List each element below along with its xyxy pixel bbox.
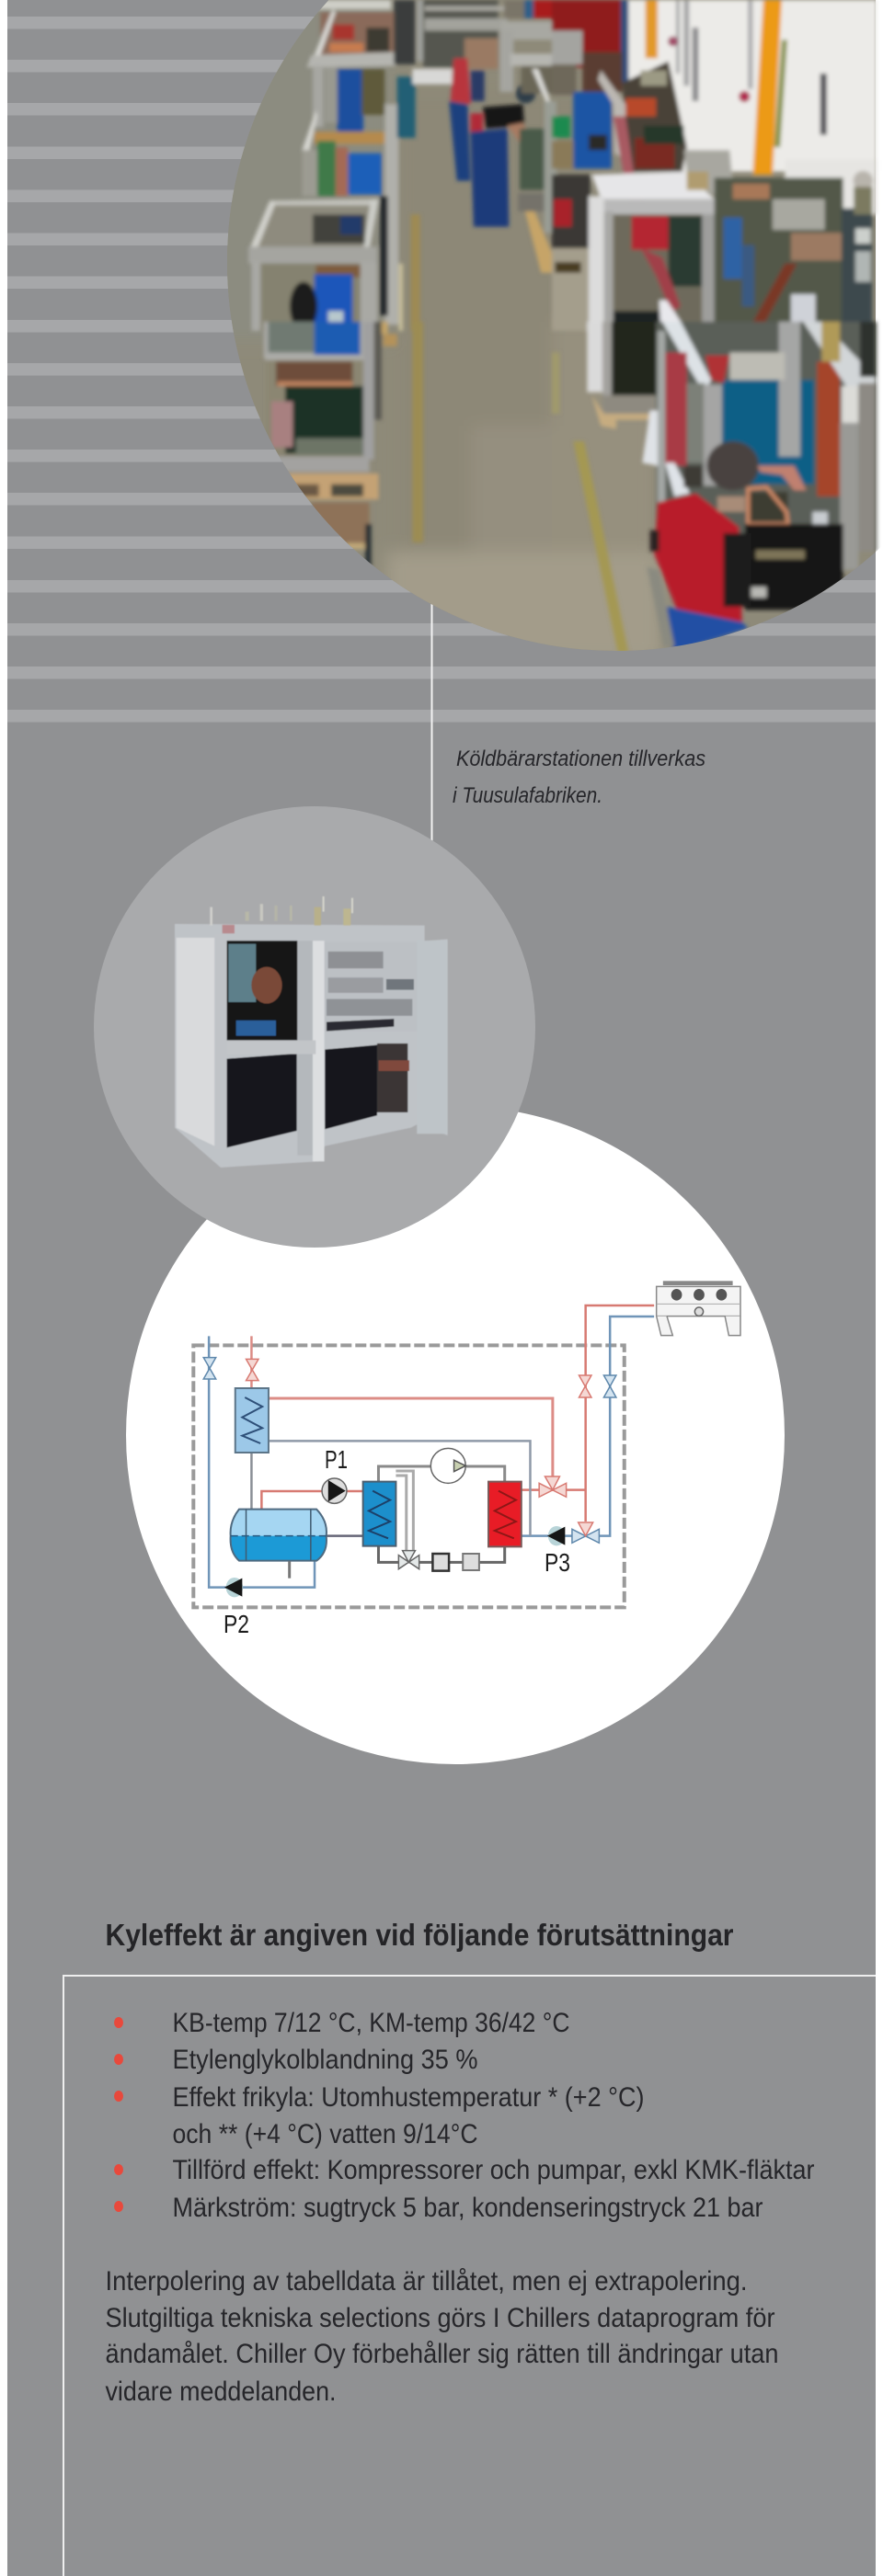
diagram labels: P1 bbox=[325, 1445, 348, 1474]
conditions list: och ** (+4 °C) vatten 9/14°C bbox=[173, 2119, 478, 2149]
gray product circle bbox=[94, 806, 535, 1248]
conditions list: Effekt frikyla: Utomhustemperatur * (+2 °C) bbox=[173, 2082, 644, 2113]
hydraulic diagram bbox=[193, 1281, 740, 1607]
pump P3 icon bbox=[547, 1526, 565, 1545]
crop coordinates: top left quadrant bbox=[248, 0, 556, 331]
caption: Köldbärarstationen tillverkas bbox=[456, 747, 705, 771]
refrigerant pipes bbox=[378, 1466, 505, 1562]
conditions list: KB-temp 7/12 °C, KM-temp 36/42 °C bbox=[173, 2008, 570, 2038]
caption: i Tuusulafabriken. bbox=[453, 783, 602, 808]
disclaimer paragraph bbox=[105, 2266, 778, 2407]
photo: factory floor in circle bbox=[216, 0, 883, 662]
diagram labels: P3 bbox=[545, 1548, 570, 1577]
blue pipes bbox=[209, 1316, 654, 1588]
diagram labels bbox=[224, 1445, 570, 1638]
diagram labels: P2 bbox=[224, 1610, 249, 1638]
conditions list: Märkström: sugtryck 5 bar, kondenseringstryck 21 bar bbox=[173, 2193, 763, 2223]
disclaimer paragraph: Slutgiltiga tekniska selections görs I Chillers dataprogram för bbox=[105, 2303, 775, 2333]
crop coordinates: lower left quadrant bbox=[264, 322, 423, 567]
crop coordinates: top right quadrant bbox=[552, 0, 877, 331]
red pipes bbox=[251, 1305, 654, 1522]
conditions list bbox=[173, 2008, 815, 2223]
upper heat exchanger bbox=[235, 1388, 269, 1453]
dashed system boundary bbox=[193, 1345, 625, 1607]
dry cooler bbox=[657, 1281, 740, 1336]
pump P1 icon bbox=[322, 1478, 347, 1503]
conditions list: Tillförd effekt: Kompressorer och pumpar, exkl KMK-fläktar bbox=[173, 2155, 815, 2185]
disclaimer paragraph: ändamålet. Chiller Oy förbehåller sig rätten till ändringar utan bbox=[105, 2339, 778, 2369]
disclaimer paragraph: Interpolering av tabelldata är tillåtet, men ej extrapolering. bbox=[105, 2266, 747, 2297]
caption bbox=[453, 747, 705, 808]
conditions list: Etylenglykolblandning 35 % bbox=[173, 2045, 478, 2075]
disclaimer paragraph: vidare meddelanden. bbox=[105, 2377, 337, 2407]
compressor bbox=[430, 1448, 465, 1483]
caption leader line bbox=[430, 598, 432, 841]
pump P2 icon bbox=[224, 1578, 243, 1597]
bullet markers bbox=[114, 2017, 123, 2212]
evaporator bbox=[363, 1482, 396, 1546]
striped band bbox=[7, 17, 876, 723]
valves bbox=[203, 1358, 616, 1571]
crop coordinates: lower right quadrant bbox=[552, 322, 877, 653]
tank bbox=[231, 1510, 327, 1579]
condenser bbox=[488, 1482, 522, 1546]
heading: Kyleffekt är angiven vid följande förutsättningar bbox=[105, 1918, 734, 1952]
product photo: cabinet bbox=[175, 896, 448, 1168]
white diagram circle bbox=[126, 1106, 785, 1764]
conditions panel outline bbox=[63, 1976, 876, 2576]
